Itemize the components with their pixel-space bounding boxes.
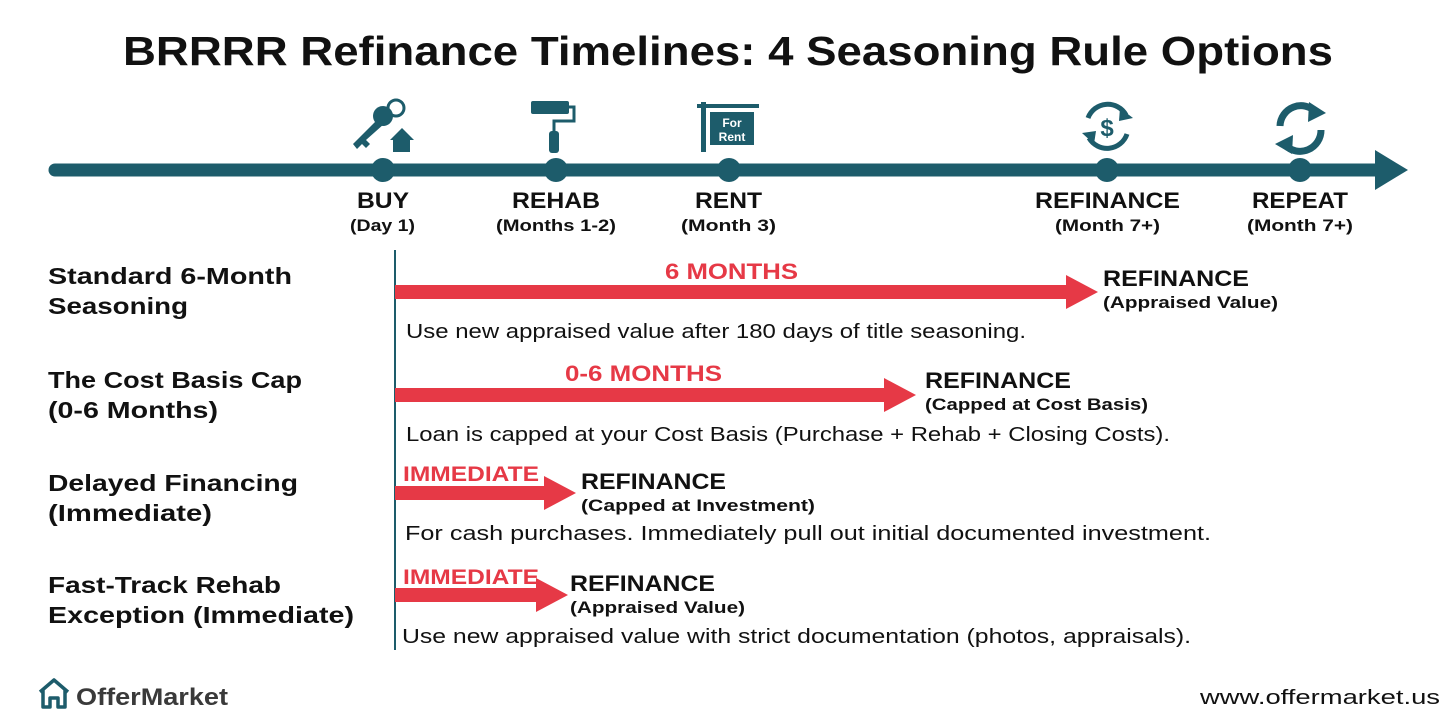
icon: repeat cycle: [1275, 102, 1326, 154]
row 3: delayed financing: REFINANCE: [581, 469, 726, 494]
icon: for rent sign: [697, 102, 759, 152]
stage labels: (Months 1-2): [496, 216, 616, 235]
stage labels: REFINANCE: [1035, 188, 1180, 213]
icon: paint roller: [531, 101, 574, 153]
row 1: standard 6-month: Standard 6-Month: [48, 263, 292, 289]
row 4: fast-track rehab: REFINANCE: [570, 571, 715, 596]
row 4: fast-track rehab: [48, 566, 1191, 648]
row 3: delayed financing: IMMEDIATE: [403, 463, 539, 486]
row 3: delayed financing: (Immediate): [48, 500, 212, 526]
stage labels: BUY: [357, 188, 409, 213]
row 3: delayed financing: (Capped at Investment): [581, 496, 815, 515]
row 1: standard 6-month: 6 MONTHS: [665, 259, 798, 284]
row 4: fast-track rehab: Fast-Track Rehab: [48, 572, 281, 598]
row 2: cost basis cap: Loan is capped at your Cost Basis (Purchase + Rehab + Closing Costs).: [406, 424, 1170, 446]
row 4: fast-track rehab: IMMEDIATE: [403, 566, 539, 589]
start line: [394, 250, 396, 650]
row 2: cost basis cap: [48, 361, 1170, 446]
row 3: delayed financing: [48, 463, 1211, 545]
row 1: standard 6-month: (Appraised Value): [1103, 293, 1278, 312]
icon: refinance dollar cycle: [1082, 104, 1133, 148]
row 2: cost basis cap: 0-6 MONTHS: [565, 361, 722, 386]
row 1: standard 6-month: [48, 259, 1278, 343]
row 2: cost basis cap: The Cost Basis Cap: [48, 367, 302, 393]
website url: www.offermarket.us: [1199, 687, 1440, 709]
stage labels: (Month 7+): [1247, 216, 1353, 235]
icon: refinance dollar cycle: $: [1100, 115, 1114, 142]
stage labels: (Month 3): [681, 216, 776, 235]
row 2: cost basis cap: (0-6 Months): [48, 397, 218, 423]
row 2: cost basis cap: REFINANCE: [925, 368, 1071, 393]
row 3: delayed financing: For cash purchases. Immediately pull out initial documented investment.: [405, 523, 1211, 545]
stage labels: REHAB: [512, 188, 600, 213]
icon: for rent sign: For: [722, 116, 742, 130]
title: BRRRR Refinance Timelines: 4 Seasoning Rule Options: [123, 28, 1333, 74]
stage labels: REPEAT: [1252, 188, 1349, 213]
row 4: fast-track rehab: Use new appraised value with strict documentation (photos, appraisals).: [402, 626, 1191, 648]
logo: OfferMarket: [40, 680, 228, 711]
row 4: fast-track rehab: Exception (Immediate): [48, 602, 354, 628]
row 3: delayed financing: Delayed Financing: [48, 470, 298, 496]
logo: OfferMarket: OfferMarket: [76, 684, 228, 711]
row 4: fast-track rehab: (Appraised Value): [570, 598, 745, 617]
row 1: standard 6-month: Seasoning: [48, 293, 188, 319]
stage labels: (Month 7+): [1055, 216, 1160, 235]
icon: key and house: [353, 100, 414, 152]
row 1: standard 6-month: Use new appraised value after 180 days of title seasoning.: [406, 321, 1026, 343]
stage labels: [350, 188, 1353, 235]
row 1: standard 6-month: REFINANCE: [1103, 266, 1249, 291]
timeline axis: [55, 150, 1408, 190]
icon: for rent sign: Rent: [719, 130, 745, 144]
stage labels: (Day 1): [350, 216, 415, 235]
stage labels: RENT: [695, 188, 763, 213]
row 2: cost basis cap: (Capped at Cost Basis): [925, 395, 1148, 414]
